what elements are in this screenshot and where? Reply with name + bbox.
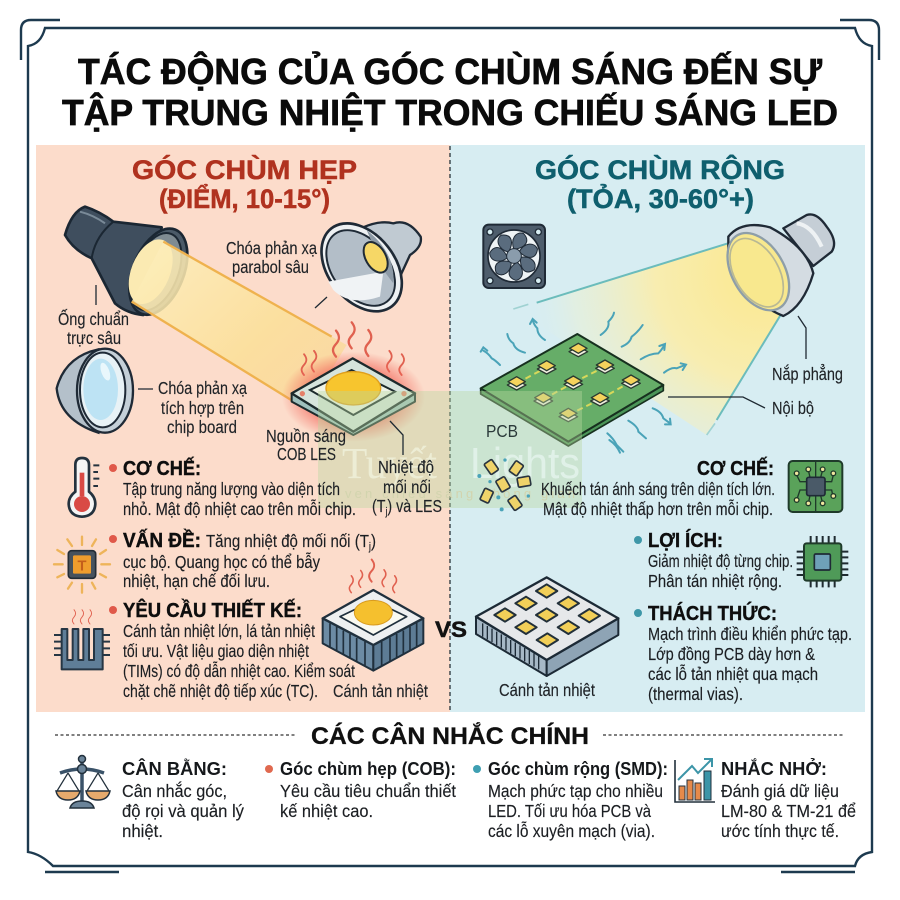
- text: wide SMD: LED. Tối ưu hóa PCB và: [488, 801, 651, 821]
- leader lines: narrow beam: [96, 285, 403, 455]
- text: wide SMD: Mạch phức tạp cho nhiều: [488, 781, 663, 801]
- icon: COB chip: [282, 352, 425, 442]
- text: challenge: THÁCH THỨC:: [648, 601, 777, 625]
- label: integrated reflector: tích hợp trên: [161, 398, 244, 418]
- label: integrated reflector: [158, 378, 247, 437]
- center dashed divider: [449, 146, 451, 712]
- bullet: problem: [109, 535, 117, 543]
- text: problem: ): [371, 531, 376, 551]
- icon: PCB board with LEDs: [481, 334, 663, 446]
- text: challenge: (thermal vias).: [648, 684, 743, 704]
- label: internal: Nội bộ: [772, 398, 814, 418]
- watermark block: [318, 391, 582, 508]
- text: challenge: Mạch trình điều khiển phức tạp.: [648, 624, 852, 644]
- heading: narrow beam: (ĐIỂM, 10-15°): [159, 184, 330, 214]
- label: PCB: PCB: [486, 421, 518, 441]
- text: challenge: các lỗ tản nhiệt qua mạch: [648, 663, 818, 684]
- text: wide SMD: các lỗ xuyên mạch (via).: [488, 820, 655, 841]
- label: COB LES: [266, 426, 346, 464]
- label: junction temperature: ) và LES: [387, 496, 442, 516]
- text: balance: Cân nhắc góc,: [122, 780, 227, 801]
- icon: collimator tube lamp: [65, 207, 199, 323]
- bullet: challenge: [634, 609, 642, 617]
- text: challenge: Lớp đồng PCB dày hơn &: [648, 644, 815, 664]
- text: problem: nhiệt, hạn chế đối lưu.: [123, 571, 270, 591]
- text: mechanism narrow: Tập trung năng lượng vào diện tích: [123, 479, 340, 499]
- heading: wide beam: (TỎA, 30-60°+): [567, 184, 754, 214]
- text: balance: CÂN BẰNG:: [122, 758, 227, 779]
- narrow beam illustrations: [57, 207, 425, 442]
- heading: key considerations: CÁC CÂN NHẮC CHÍNH: [311, 722, 589, 750]
- text: benefit: Giảm nhiệt độ từng chip.: [648, 551, 793, 571]
- bullet: wide SMD: [473, 765, 481, 773]
- text: benefit: Phân tán nhiệt rộng.: [648, 571, 782, 591]
- label: parabolic reflector: [226, 238, 317, 277]
- icon: large heatsink with COB: [323, 590, 423, 671]
- icon: scattered LEDs: [477, 458, 531, 511]
- label: junction temperature: mối nối: [383, 477, 431, 497]
- watermark block: ven chiếu sáng không gian: [345, 486, 575, 501]
- heading: wide beam: [535, 155, 785, 214]
- title: TÁC ĐỘNG CỦA GÓC CHÙM SÁNG ĐẾN SỰ: [78, 50, 823, 92]
- label: heatsink right: Cánh tản nhiệt: [499, 680, 595, 700]
- bullet: benefit: [634, 536, 642, 544]
- text: balance: độ rọi và quản lý: [122, 801, 244, 821]
- label: junction temperature: j: [385, 506, 387, 518]
- text: design requirements: YÊU CẦU THIẾT KẾ:: [123, 598, 302, 622]
- watermark block: Tuyết: [342, 439, 437, 488]
- title: [62, 50, 838, 133]
- panel: narrow beam background: [36, 145, 450, 712]
- text: narrow COB: [280, 759, 456, 821]
- text: reminder: [721, 758, 856, 841]
- text: reminder: Đánh giá dữ liệu: [721, 781, 839, 801]
- icon: hot chip: [54, 537, 110, 593]
- icon: multi-LED heatsink: [476, 577, 618, 676]
- text: challenge: [648, 601, 852, 704]
- text: reminder: NHẮC NHỞ:: [721, 758, 827, 779]
- label: flat cap: Nắp phẳng: [772, 363, 843, 384]
- leader lines: wide beam: [668, 316, 806, 408]
- text: design requirements: chặt chẽ nhiệt độ tiếp xúc (TC).: [123, 681, 318, 701]
- text: reminder: ước tính thực tế.: [721, 821, 839, 841]
- icon: LM-80 chart: [675, 759, 715, 802]
- airflow arrows: [481, 313, 686, 452]
- text: wide SMD: Góc chùm rộng (SMD):: [488, 759, 668, 779]
- VS label: VS: [435, 617, 467, 642]
- text: balance: [122, 758, 244, 841]
- text: design requirements: [123, 598, 355, 701]
- text: problem: VẤN ĐỀ:: [123, 529, 201, 552]
- icon: processor chip: [797, 536, 848, 587]
- text: narrow COB: kế nhiệt cao.: [280, 801, 373, 821]
- bullet: design requirements: [109, 606, 117, 614]
- text: design requirements: Cánh tản nhiệt lớn, lá tản nhiệt: [123, 621, 315, 641]
- icon: thermometer: [69, 458, 99, 517]
- text: benefit: [648, 529, 793, 591]
- heat waves: [302, 322, 404, 375]
- wide beam text icons: [476, 440, 848, 676]
- text: benefit: LỢI ÍCH:: [648, 529, 723, 552]
- icon: heat waves over large heatsink: [349, 560, 397, 593]
- label: collimator: Ống chuẩn: [58, 308, 129, 329]
- airflow arrow under PCB: [609, 440, 620, 453]
- label: parabolic reflector: parabol sâu: [232, 257, 309, 277]
- watermark block: Lights: [470, 439, 580, 488]
- label: parabolic reflector: Chóa phản xạ: [226, 238, 317, 258]
- label: collimator: trực sâu: [67, 328, 121, 348]
- light beam: [132, 242, 347, 410]
- bullet: narrow COB: [265, 765, 273, 773]
- text: mechanism wide: Khuếch tán ánh sáng trên diện tích lớn.: [541, 479, 775, 499]
- label: integrated reflector: chip board: [167, 417, 237, 437]
- label: junction temperature: Nhiệt độ: [378, 457, 434, 477]
- text: narrow COB: Góc chùm hẹp (COB):: [280, 759, 456, 779]
- text: mechanism narrow: CƠ CHẾ:: [123, 457, 201, 480]
- label: collimator: [58, 308, 129, 348]
- label: junction temperature: [372, 457, 442, 518]
- label: COB LES: Nguồn sáng: [266, 426, 346, 446]
- text: mechanism wide: [541, 457, 775, 519]
- narrow beam text icons: [54, 458, 423, 671]
- text: mechanism narrow: [123, 457, 356, 519]
- text: mechanism wide: Mật độ nhiệt thấp hơn trên mỗi chip.: [543, 498, 773, 519]
- heading: narrow beam: GÓC CHÙM HẸP: [132, 155, 357, 185]
- bullet: mechanism: [109, 464, 117, 472]
- text: design requirements: (TIMs) có độ dẫn nhiệt cao. Kiểm soát: [123, 660, 355, 681]
- text: mechanism narrow: nhỏ. Mật độ nhiệt cao trên mỗi chip.: [123, 498, 356, 519]
- label: junction temperature: (T: [372, 496, 389, 516]
- icon: fan: [483, 225, 545, 288]
- text: balance: nhiệt.: [122, 821, 163, 841]
- text: narrow COB: Yêu cầu tiêu chuẩn thiết: [280, 781, 456, 801]
- panel: wide beam background: [450, 145, 865, 712]
- heading: wide beam: GÓC CHÙM RỘNG: [535, 155, 785, 185]
- text: problem: Tăng nhiệt độ mối nối (T: [206, 531, 396, 551]
- text: wide SMD: [488, 759, 668, 841]
- icon: integrated lens reflector: [57, 349, 133, 433]
- label: heatsink left: Cánh tản nhiệt: [333, 681, 428, 701]
- wide beam illustrations: [481, 214, 834, 452]
- text: reminder: LM-80 & TM-21 để: [721, 801, 856, 821]
- icon: parabolic reflector: [305, 208, 421, 327]
- title: TẬP TRUNG NHIỆT TRONG CHIẾU SÁNG LED: [62, 91, 838, 133]
- icon: circuit board: [789, 461, 842, 512]
- text: problem: cục bộ. Quang học có thể bẫy: [123, 551, 320, 572]
- text: design requirements: tối ưu. Vật liệu giao diện nhiệt: [123, 641, 309, 661]
- label: integrated reflector: Chóa phản xạ: [158, 378, 247, 398]
- light beam wide: [513, 242, 787, 435]
- icon: balance scale: [56, 756, 110, 808]
- text: problem: [123, 529, 376, 591]
- text: mechanism wide: CƠ CHẾ:: [697, 457, 774, 480]
- icon: flat cap lamp: [715, 214, 834, 321]
- icon: heatsink small: [54, 610, 110, 669]
- icon: hot chip: T: [78, 559, 87, 575]
- text: problem: j: [368, 541, 371, 553]
- label: COB LES: COB LES: [277, 444, 336, 464]
- heading: narrow beam: [132, 155, 357, 214]
